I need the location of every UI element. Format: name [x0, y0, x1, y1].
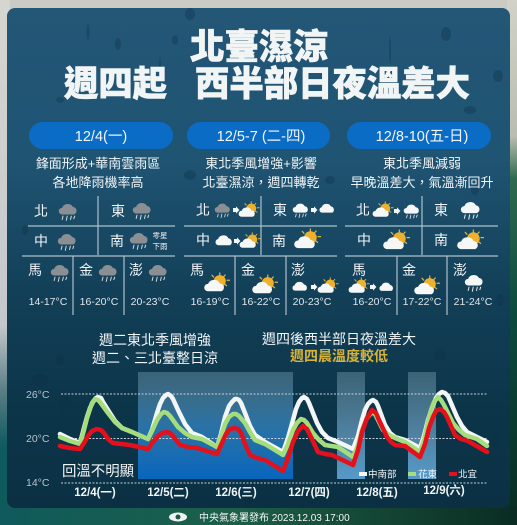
chart heading left: 週二東北季風增強	[99, 332, 211, 348]
region labels and icons 12/5-7: 南	[272, 233, 286, 249]
region labels and icons 12/8-10: 金	[402, 262, 416, 278]
date labels: 12/9(六)	[423, 483, 465, 497]
summary 12/8-10: 早晚溫差大，氣溫漸回升	[350, 175, 494, 190]
chart heading left: 週二、三北臺整日涼	[92, 350, 218, 366]
legend: 中南部	[368, 468, 397, 480]
region labels and icons 12/4: 東	[111, 203, 125, 219]
date pill 12/4	[29, 122, 173, 149]
region labels and icons 12/8-10: 北	[356, 202, 370, 218]
axis labels: 26°C	[26, 389, 50, 401]
date labels: 12/4(一)	[74, 487, 116, 499]
summary 12/5-7: 北臺濕涼，週四轉乾	[202, 175, 320, 190]
grid 12/8-10	[345, 196, 498, 315]
date labels: 12/8(五)	[356, 487, 398, 499]
region labels and icons 12/8-10: 中	[357, 232, 371, 248]
legend: 北宜	[458, 468, 477, 480]
panel: 12/5-7 forecast	[184, 122, 338, 315]
panel: 12/4 forecast	[22, 122, 175, 315]
summary 12/8-10	[350, 156, 494, 190]
chart heading right: 週四晨溫度較低	[290, 348, 388, 364]
rain drop texture	[22, 8, 504, 448]
region labels and icons 12/5-7: 北	[196, 202, 210, 218]
axis labels: 14°C	[26, 477, 50, 489]
date labels: 12/6(三)	[215, 487, 257, 499]
title	[64, 28, 470, 104]
grid 12/5-7	[184, 196, 337, 315]
date pill 12/5-7: 12/5-7 (二-四)	[217, 129, 305, 145]
series: 中南部	[60, 392, 487, 452]
date pill 12/5-7	[187, 122, 330, 149]
summary 12/4: 鋒面形成+華南雲雨區	[36, 156, 160, 171]
date pill 12/8-10	[347, 122, 491, 149]
region labels and icons 12/4: 馬	[28, 262, 42, 278]
temperature line chart	[26, 372, 487, 499]
date labels: 12/5(二)	[147, 487, 189, 499]
region labels and icons 12/5-7: 16-19°C	[191, 296, 230, 308]
region labels and icons 12/4: 零星	[152, 231, 168, 240]
region labels and icons 12/8-10: 16-20°C	[353, 296, 392, 308]
region labels and icons 12/4: 金	[79, 262, 93, 278]
date labels	[74, 483, 465, 499]
highlighted periods	[138, 372, 436, 479]
icon: agency logo	[169, 512, 187, 522]
region labels and icons 12/4: 下雨	[152, 242, 168, 251]
region labels and icons 12/4: 南	[110, 233, 124, 249]
region labels and icons 12/8-10: 東	[434, 202, 448, 218]
region labels and icons 12/4	[28, 203, 170, 308]
callout: 回溫不明顯: 回溫不明顯	[62, 463, 134, 480]
region labels and icons 12/5-7: 20-23°C	[293, 296, 332, 308]
region labels and icons 12/4: 16-20°C	[80, 296, 119, 308]
series: 花東	[60, 397, 487, 457]
summary 12/4	[36, 156, 160, 190]
date pill 12/8-10: 12/8-10(五-日)	[376, 129, 468, 145]
legend: 花東	[418, 468, 438, 480]
region labels and icons 12/8-10: 17-22°C	[403, 296, 442, 308]
date labels: 12/7(四)	[288, 487, 330, 499]
title: 北臺濕涼	[190, 28, 328, 67]
region labels and icons 12/4: 中	[34, 233, 48, 249]
chart heading right	[262, 331, 416, 364]
region labels and icons 12/8-10: 澎	[453, 262, 467, 278]
region labels and icons 12/4: 20-23°C	[131, 296, 170, 308]
legend	[359, 468, 477, 480]
region labels and icons 12/8-10: 南	[434, 232, 448, 248]
summary 12/5-7	[202, 156, 320, 190]
region labels and icons 12/8-10	[349, 202, 493, 308]
title: 週四起	[64, 65, 167, 104]
footer credit: 中央氣象署發布 2023.12.03 17:00	[199, 511, 350, 524]
region labels and icons 12/5-7: 金	[241, 262, 255, 278]
region labels and icons 12/5-7: 東	[273, 202, 287, 218]
summary 12/8-10: 東北季風減弱	[383, 156, 461, 171]
region labels and icons 12/5-7: 中	[196, 232, 210, 248]
series: 北宜	[60, 409, 487, 471]
region labels and icons 12/8-10: 21-24°C	[454, 296, 493, 308]
date pill 12/4: 12/4(一)	[75, 129, 127, 145]
grid 12/4	[22, 196, 175, 315]
region labels and icons 12/5-7: 澎	[291, 262, 305, 278]
region labels and icons 12/8-10: 馬	[352, 262, 366, 278]
title: 西半部日夜溫差大	[195, 65, 470, 104]
region labels and icons 12/4: 澎	[129, 262, 143, 278]
region labels and icons 12/5-7	[190, 202, 338, 308]
region labels and icons 12/5-7: 馬	[190, 262, 204, 278]
axis labels: 20°C	[26, 433, 50, 445]
chart heading right: 週四後西半部日夜溫差大	[262, 331, 416, 347]
region labels and icons 12/4: 北	[34, 203, 48, 219]
region labels and icons 12/5-7: 16-22°C	[242, 296, 281, 308]
axis labels	[26, 389, 50, 489]
summary 12/4: 各地降雨機率高	[52, 175, 144, 190]
panel: 12/8-10 forecast	[345, 122, 498, 315]
summary 12/5-7: 東北季風增強+影響	[205, 156, 317, 171]
chart heading left	[92, 332, 218, 366]
region labels and icons 12/4: 14-17°C	[29, 296, 68, 308]
gridlines	[61, 394, 487, 483]
